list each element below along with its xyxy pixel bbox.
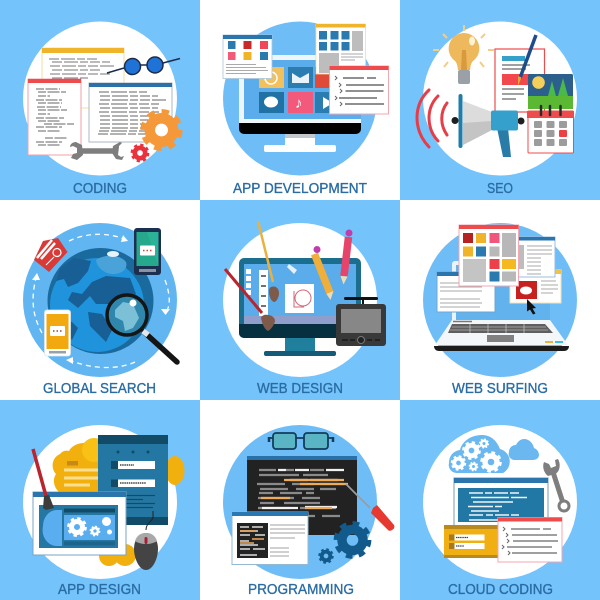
red code window <box>28 79 81 155</box>
monitor <box>239 55 361 152</box>
icon: laptop <box>434 261 569 351</box>
panel: web surfing <box>400 200 600 400</box>
icon: small gear <box>320 550 332 562</box>
icon: paint brush <box>33 449 54 510</box>
panel: seo <box>400 0 600 200</box>
icon: large gear <box>337 524 368 556</box>
list window <box>498 518 562 562</box>
yellow clouds <box>53 438 184 566</box>
icon: screwdriver <box>346 484 394 531</box>
panel: web design <box>200 200 400 400</box>
settings window <box>33 492 126 555</box>
icon: magnifier <box>107 295 177 362</box>
icon: pen <box>518 35 536 86</box>
icon: globe <box>48 248 154 354</box>
login card <box>444 525 498 558</box>
panel: app design <box>0 400 200 600</box>
monitor <box>239 258 361 356</box>
panel: coding <box>0 0 200 200</box>
app tiles <box>259 67 340 113</box>
icon: small cloud <box>509 439 539 460</box>
app tiles: ♪ <box>295 95 302 112</box>
panel: programming <box>200 400 400 600</box>
document <box>495 49 544 112</box>
icon: wrench <box>70 142 124 160</box>
text window <box>232 512 308 564</box>
panel: cloud coding <box>400 400 600 600</box>
icon: red gear <box>132 145 148 161</box>
icon: pink pencil <box>340 230 352 284</box>
dashed orbit arrows <box>32 234 170 368</box>
code window <box>454 478 548 544</box>
code window <box>247 456 357 535</box>
icon: glasses <box>269 433 333 449</box>
window: tile grid <box>223 35 272 78</box>
icon: yellow pencil <box>314 246 334 300</box>
label: APP DESIGN <box>58 581 141 598</box>
label: GLOBAL SEARCH <box>43 380 156 397</box>
label: APP DEVELOPMENT <box>233 180 367 197</box>
icon: megaphone <box>452 94 524 157</box>
icon: orange phone <box>44 310 70 356</box>
icon: green phone <box>134 228 161 275</box>
window: dashboard <box>316 24 366 74</box>
icon: wrench <box>543 459 569 511</box>
icon: red envelope <box>34 238 68 272</box>
window: blue left <box>437 272 495 312</box>
label: SEO <box>487 180 513 197</box>
label: CLOUD CODING <box>448 581 553 598</box>
picture <box>528 74 573 109</box>
calendar <box>527 106 574 153</box>
window: blue right <box>518 237 555 277</box>
window: tile grid <box>459 225 518 286</box>
tool palette <box>246 269 268 316</box>
icon: orange gear <box>144 112 179 148</box>
icon: glasses <box>107 57 180 74</box>
label: WEB DESIGN <box>257 380 343 397</box>
blue code window <box>89 83 172 142</box>
panel: app development <box>200 0 400 200</box>
design canvas <box>285 264 314 313</box>
yellow code window <box>42 48 124 108</box>
icon: red brush <box>225 269 275 331</box>
icon: cloud with gears <box>449 435 510 473</box>
window: list <box>330 66 388 114</box>
icon: tan brush <box>258 221 279 302</box>
sound waves <box>417 90 447 147</box>
login panel <box>98 435 168 525</box>
label: CODING <box>73 180 127 197</box>
label: WEB SURFING <box>452 380 548 397</box>
icon: mouse <box>134 511 158 570</box>
icon: drawing tablet <box>336 297 386 346</box>
panel: global search <box>0 200 200 400</box>
icon: cursor <box>527 299 536 314</box>
window: yellow with message <box>510 270 561 303</box>
icon: light bulb <box>433 25 494 84</box>
label: PROGRAMMING <box>248 581 354 598</box>
